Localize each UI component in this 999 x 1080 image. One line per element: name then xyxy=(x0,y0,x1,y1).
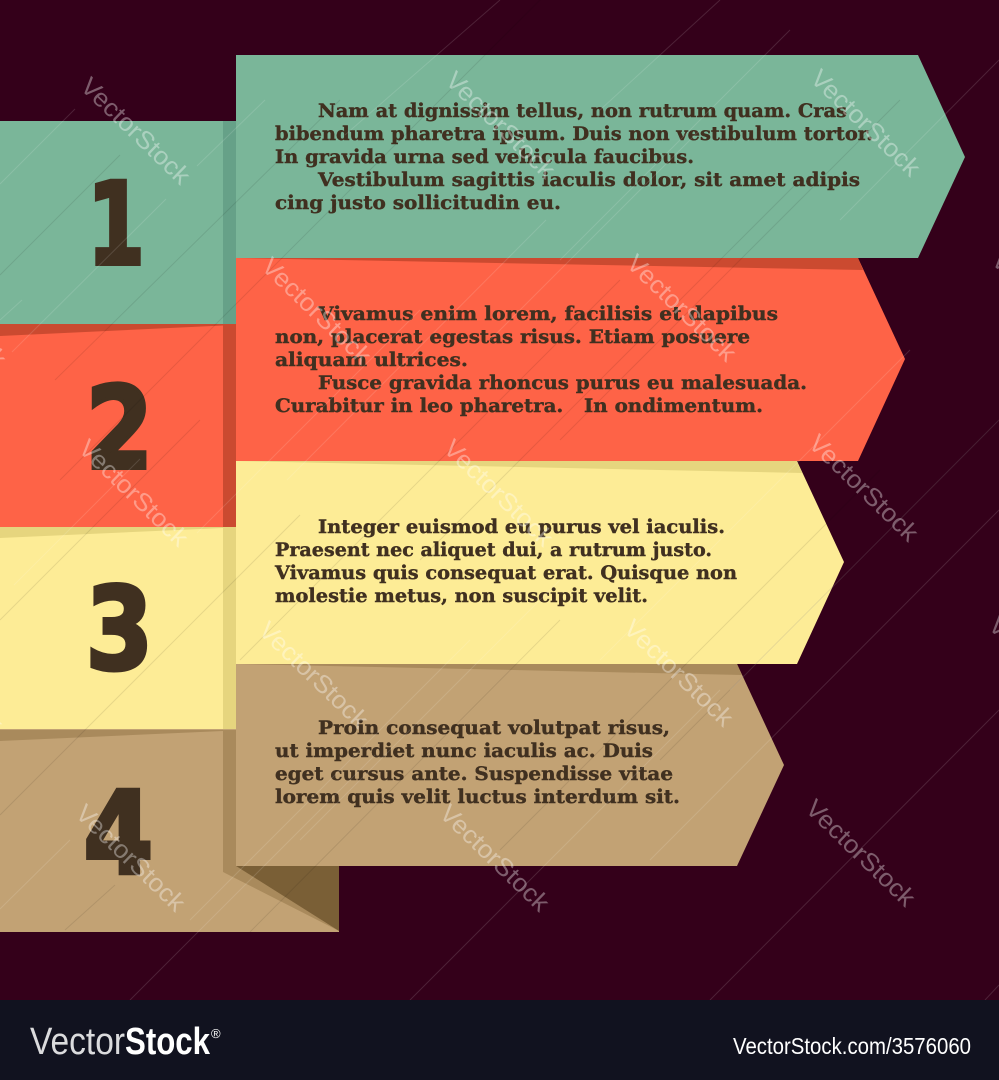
number 1: 1 xyxy=(87,158,145,291)
panel: band 2 xyxy=(0,324,236,527)
text block 4: Proin consequat volutpat risus, xyxy=(318,717,670,739)
watermarks: VectorStock xyxy=(805,64,926,183)
watermarks: VectorStock xyxy=(438,434,559,553)
panel: arrow 1 xyxy=(236,55,965,258)
text block 2: Vivamus enim lorem, facilisis et dapibus xyxy=(317,303,778,325)
text block 2 xyxy=(275,303,807,417)
footer logo: Stock xyxy=(125,1021,211,1063)
watermarks: VectorStock xyxy=(256,252,377,371)
footer logo: ® xyxy=(211,1026,221,1041)
text block 4: ut imperdiet nunc iaculis ac. Duis xyxy=(275,740,653,762)
number 2: 2 xyxy=(86,362,153,495)
text block 2: aliquam ultrices. xyxy=(275,349,468,371)
panel: arrow 3 xyxy=(236,461,844,664)
text block 3: Praesent nec aliquet dui, a rutrum justo. xyxy=(275,539,712,561)
panel: arrow 2 xyxy=(236,258,905,461)
text block 2: Curabitur in leo pharetra. In ondimentum. xyxy=(275,395,763,417)
panel: arrow 4 xyxy=(236,664,784,866)
watermarks: VectorStock xyxy=(618,614,739,733)
watermarks: VectorStock xyxy=(70,799,191,918)
number 4: 4 xyxy=(83,767,153,900)
text block 3: molestie metus, non suscipit velit. xyxy=(275,585,648,607)
watermarks: VectorStock xyxy=(253,616,374,735)
watermarks: VectorStock xyxy=(621,249,742,368)
text block 3: Vivamus quis consequat erat. Quisque non xyxy=(274,562,737,584)
text block 4 xyxy=(275,717,680,808)
watermarks: VectorStock xyxy=(75,72,196,191)
watermarks: VectorStock xyxy=(73,434,194,553)
watermarks xyxy=(0,64,999,918)
text block 1 xyxy=(275,100,873,214)
footer bar xyxy=(0,1000,999,1080)
number 3: 3 xyxy=(86,563,153,696)
text block 2: Fusce gravida rhoncus purus eu malesuada. xyxy=(318,372,807,394)
watermarks: VectorStock xyxy=(440,66,561,185)
footer logo: Vector xyxy=(30,1021,125,1063)
text block 1: Vestibulum sagittis iaculis dolor, sit amet adipis xyxy=(317,169,860,191)
panel: band 1 xyxy=(0,121,236,324)
watermarks: VectorStock xyxy=(800,794,921,913)
text block 1: bibendum pharetra ipsum. Duis non vestibulum tortor. xyxy=(275,123,873,145)
text block 1: Nam at dignissim tellus, non rutrum quam. Cras xyxy=(318,100,847,122)
footer url: VectorStock.com/3576060 xyxy=(733,1033,971,1059)
text block 3 xyxy=(274,516,737,607)
watermarks: VectorStock xyxy=(434,799,555,918)
text block 2: non, placerat egestas risus. Etiam posuere xyxy=(275,326,750,348)
text block 1: cing justo sollicitudin eu. xyxy=(275,192,561,214)
footer logo xyxy=(30,1021,221,1063)
ribbon fold xyxy=(236,866,339,931)
text block 4: eget cursus ante. Suspendisse vitae xyxy=(275,763,673,785)
text block 1: In gravida urna sed vehicula faucibus. xyxy=(275,146,694,168)
panel: band 3 xyxy=(0,527,236,730)
text block 4: lorem quis velit luctus interdum sit. xyxy=(275,786,680,808)
watermarks: VectorStock xyxy=(803,429,924,548)
text block 3: Integer euismod eu purus vel iaculis. xyxy=(318,516,725,538)
panel: band 4 with fold xyxy=(0,729,339,932)
